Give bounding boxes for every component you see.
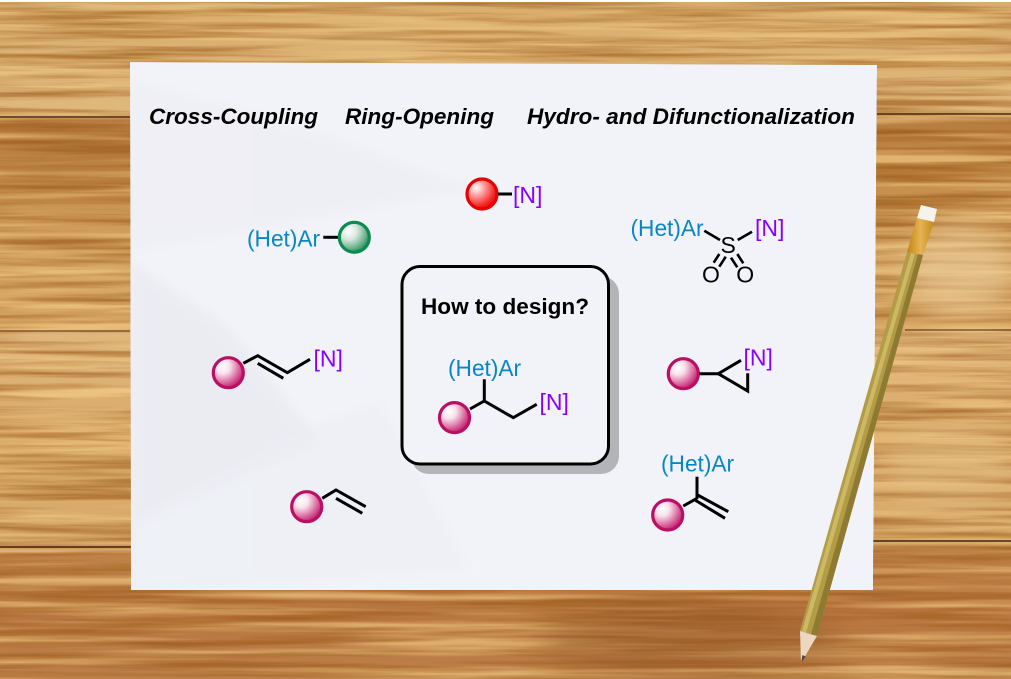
target structure: [N] bbox=[540, 389, 569, 415]
heading: Ring-Opening: Ring-Opening bbox=[345, 104, 495, 129]
icon: pencil bbox=[800, 205, 937, 663]
structure: sulfonamide: (Het)Ar bbox=[630, 215, 704, 241]
target structure: (Het)Ar bbox=[448, 355, 522, 381]
structure: red sphere amine bbox=[467, 179, 542, 209]
structure: aryl alkene bbox=[653, 451, 735, 530]
structure: aryl green sphere: (Het)Ar bbox=[247, 226, 321, 252]
pencil ferrule bbox=[907, 218, 934, 255]
panel box bbox=[402, 266, 608, 464]
heading: Cross-Coupling: Cross-Coupling bbox=[149, 104, 319, 129]
target structure bbox=[440, 355, 569, 433]
paper sheet bbox=[125, 62, 877, 595]
structure: enamine: [N] bbox=[314, 346, 343, 372]
structure: sulfonamide: S bbox=[720, 232, 736, 258]
pencil eraser bbox=[917, 205, 937, 222]
structure: aziridine bbox=[668, 345, 773, 391]
panel heading: How to design? bbox=[421, 294, 589, 319]
heading: reaction types bbox=[149, 104, 855, 129]
panel shadow bbox=[411, 276, 619, 474]
structure: sulfonamide bbox=[630, 215, 784, 288]
structure: aryl alkene: (Het)Ar bbox=[661, 451, 735, 477]
structure: enamine bbox=[213, 346, 343, 388]
heading: Hydro- and Difunctionalization: Hydro- and Difunctionalization bbox=[527, 104, 855, 129]
structure: red sphere amine: [N] bbox=[513, 182, 542, 208]
structure: aryl green sphere bbox=[247, 222, 369, 252]
structure: sulfonamide: [N] bbox=[755, 215, 784, 241]
structure: sulfonamide: O bbox=[736, 262, 754, 288]
structure: sulfonamide: O bbox=[702, 262, 720, 288]
pencil tip bbox=[800, 631, 817, 663]
pencil body bbox=[800, 252, 923, 636]
structure: terminal alkene bbox=[292, 490, 366, 522]
panel: how to design bbox=[402, 266, 619, 474]
structure: aziridine: [N] bbox=[744, 345, 773, 371]
